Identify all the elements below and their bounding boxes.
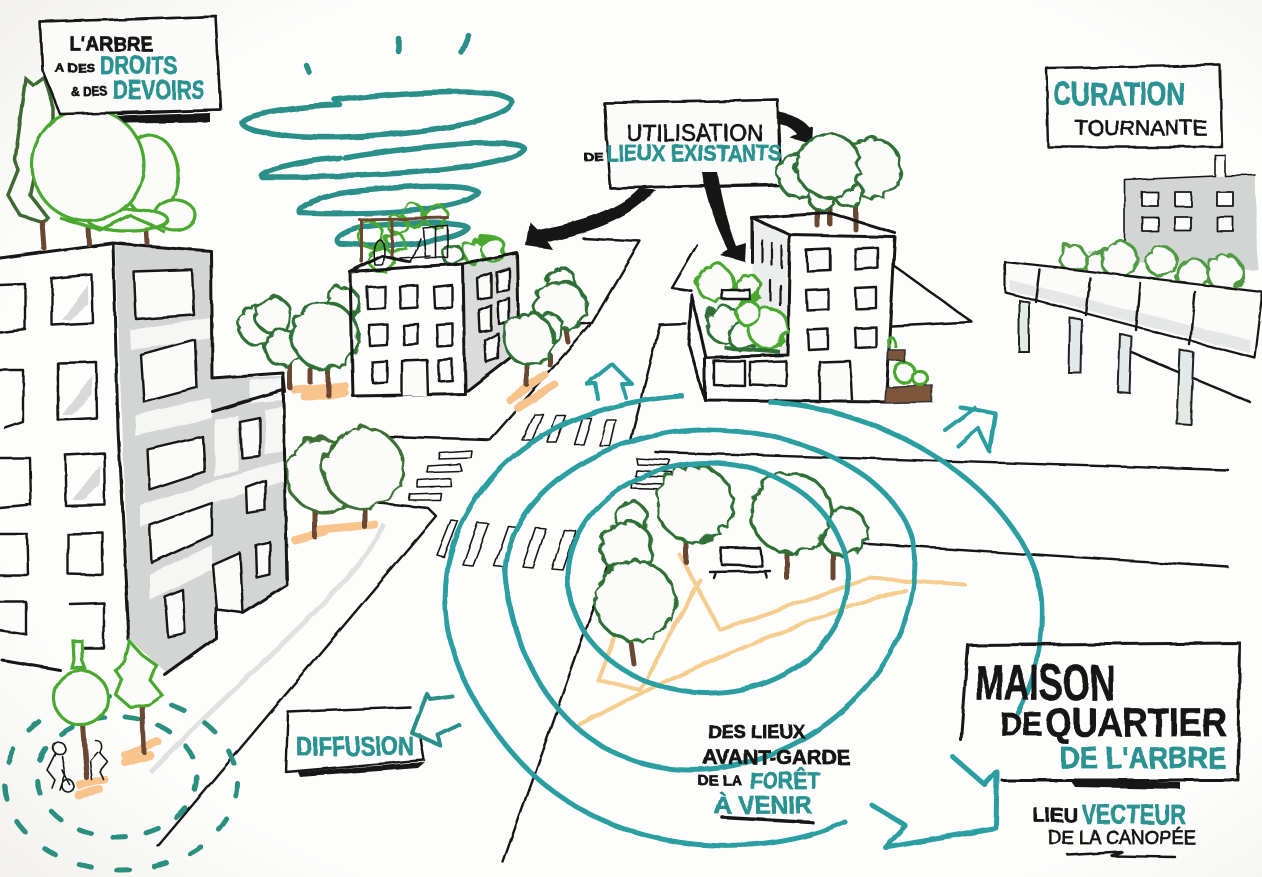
rooftop trees on left building [8, 77, 195, 248]
curation sign [1046, 65, 1222, 147]
right building with roof trees and terrace [689, 130, 932, 403]
rear building [1125, 155, 1258, 270]
caption: des lieux avant-garde: AVANT-GARDE [703, 747, 850, 769]
trees at road corner [284, 425, 400, 540]
sign: utilisation de lieux existants: LIEUX EXISTANTS [606, 140, 782, 166]
caption: des lieux avant-garde: DE LA [698, 772, 742, 788]
title panel: maison de quartier de l'arbre: DE [1000, 706, 1042, 742]
roof garden [356, 201, 502, 268]
road network lines [150, 238, 1250, 862]
black arrows from the sign [526, 112, 813, 262]
sign: diffusion [286, 694, 459, 777]
sign text: CURATION [1053, 76, 1185, 112]
sign text: UTILISATION [626, 120, 763, 147]
title panel: maison de quartier de l'arbre: QUARTIER [1045, 701, 1227, 745]
sign: l'arbre a des droits et des devoirs: DROITS [100, 52, 177, 80]
caption: lieu vecteur de la canopée: LIEU [1033, 806, 1078, 827]
side windows [134, 270, 270, 637]
platform legs [1019, 300, 1194, 425]
building shading [115, 245, 287, 674]
building outline [0, 243, 287, 675]
diffusion arrow [412, 694, 459, 745]
green hedge [1057, 238, 1240, 288]
door [213, 553, 243, 613]
title text: MAISON [975, 655, 1115, 711]
sign text: L'ARBRE [70, 34, 153, 56]
elevated platform with rear building [1005, 155, 1262, 425]
title panel: maison de quartier de l'arbre [961, 643, 1240, 789]
sign: l'arbre a des droits et des devoirs [40, 16, 221, 123]
small building with roof garden [350, 201, 519, 396]
trees right of small building [501, 265, 583, 408]
roof trees [774, 130, 898, 230]
caption: lieu vecteur de la canopée: DE LA CANOPÉE [1048, 828, 1196, 849]
caption: des lieux avant-garde [698, 722, 850, 822]
terrace wall [689, 295, 706, 400]
caption: des lieux avant-garde: À VENIR [714, 791, 812, 819]
title panel: maison de quartier de l'arbre: DE L'ARBRE [1060, 742, 1226, 775]
sign: l'arbre a des droits et des devoirs: & DES [71, 84, 108, 99]
sign: utilisation de lieux existants [583, 100, 782, 188]
concentric teal circles [445, 396, 1042, 846]
central park [580, 463, 965, 725]
bench [710, 547, 770, 578]
sign: l'arbre a des droits et des devoirs: DEVOIRS [113, 75, 205, 105]
front windows [0, 284, 31, 634]
orange ground paths [580, 555, 965, 725]
diffusion text: DIFFUSION [296, 731, 414, 761]
crosswalks [409, 414, 672, 570]
tower [705, 213, 895, 402]
left large building [0, 243, 287, 675]
terrace greenery [694, 262, 785, 347]
teal sound swirls [242, 35, 524, 245]
trees between left building and small building [235, 284, 356, 397]
caption: lieu vecteur de la canopée [1033, 799, 1196, 857]
dashed teal circles and sapling trees [5, 641, 237, 870]
caption: des lieux avant-garde: FORÊT [750, 767, 820, 795]
sign: utilisation de lieux existants: DE [583, 151, 603, 163]
curation sign: TOURNANTE [1075, 117, 1207, 140]
planter boxes [885, 337, 932, 403]
gardeners [47, 740, 108, 792]
platform deck [1005, 262, 1262, 358]
sign: l'arbre a des droits et des devoirs: A DES [55, 61, 95, 75]
park trees [592, 463, 864, 664]
caption: lieu vecteur de la canopée: VECTEUR [1082, 799, 1186, 830]
caption: des lieux avant-garde: DES LIEUX [708, 722, 805, 742]
teal direction arrows [587, 364, 997, 847]
